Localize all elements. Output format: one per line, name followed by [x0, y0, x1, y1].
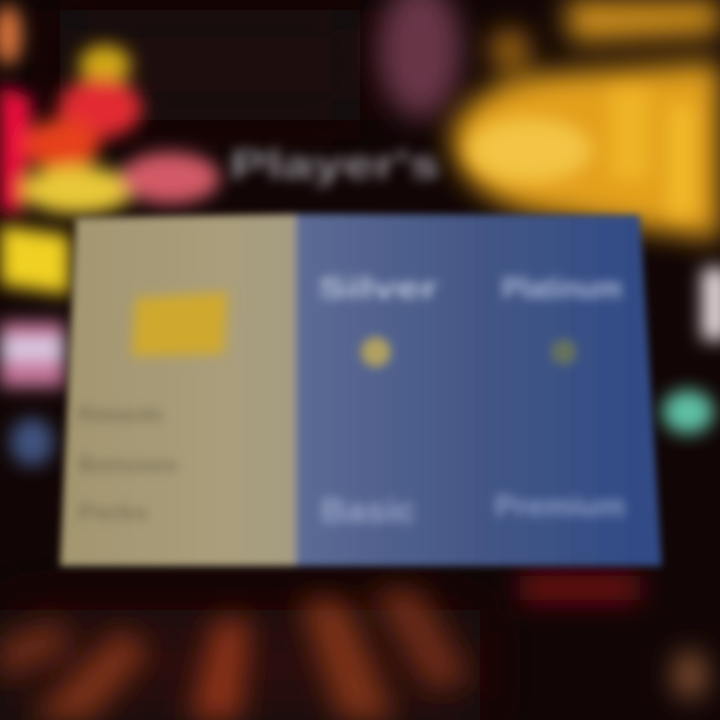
icon: check mark column two	[551, 339, 577, 365]
row label three: Perks	[78, 500, 148, 525]
value: column two bottom: Premium	[495, 490, 625, 523]
right edge lights	[662, 268, 720, 434]
title: Player's	[230, 143, 440, 187]
comparison table panel	[60, 214, 662, 566]
top-right gold lights	[452, 0, 720, 240]
panel: left tan column	[60, 214, 296, 566]
top-left neon sign	[0, 5, 220, 214]
row label one: Rewards	[78, 402, 163, 427]
column heading: left blue column: Silver	[318, 272, 438, 305]
icon: check mark column one	[361, 337, 391, 367]
row label two: Bonuses	[78, 452, 178, 477]
panel: right blue columns	[296, 214, 662, 566]
value: column one bottom: Basic	[320, 492, 416, 530]
left edge light strips	[0, 225, 70, 466]
row labels	[78, 402, 178, 525]
column heading: right blue column: Platinum	[502, 272, 622, 305]
icon: gold card	[132, 292, 228, 356]
